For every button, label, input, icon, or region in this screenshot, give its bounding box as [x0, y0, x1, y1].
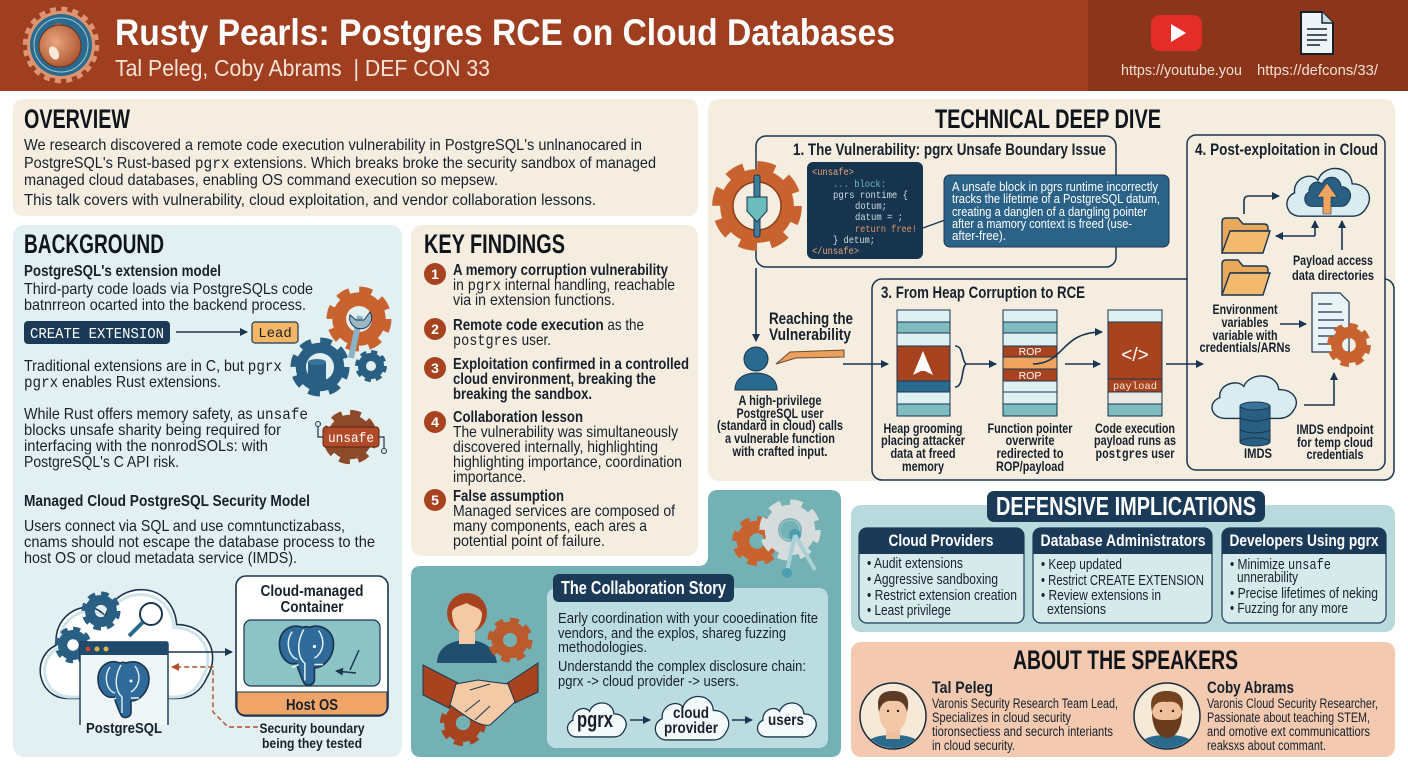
- collaboration text: [558, 611, 818, 690]
- rust safety text: While Rust offers memory safety, as unsafe: [24, 406, 308, 424]
- finding 5: Managed services are composed of: [453, 503, 675, 520]
- speaker: tal peleg: Tal Peleg: [932, 678, 993, 697]
- icon: gears and wrench: [294, 291, 387, 392]
- card: developers using pgrx: unnerability: [1237, 570, 1299, 586]
- card: database administrators: Database Administrators: [1040, 531, 1206, 550]
- label: container: Container: [280, 599, 344, 616]
- callout: unsafe block explanation: after-free).: [952, 228, 1006, 243]
- extension model text: [24, 281, 313, 314]
- title: Rusty Pearls: Postgres RCE on Cloud Databases: [115, 12, 895, 53]
- label: payload access: [1292, 252, 1374, 283]
- heading: step 1: 1. The Vulnerability: pgrx Unsafe Boundary Issue: [793, 140, 1106, 159]
- card: database administrators: • Review extensions in: [1041, 588, 1161, 604]
- user description: A high-privilege: [738, 392, 822, 408]
- brace and arrow: [955, 346, 996, 387]
- heap stack 3: payload: [1113, 381, 1157, 393]
- icon: user: [735, 347, 777, 390]
- label: environment variables: variables: [1222, 314, 1269, 330]
- finding 3: Exploitation confirmed in a controlled: [453, 356, 689, 373]
- finding 4: 4: [431, 414, 439, 430]
- caption: code execution: [1094, 420, 1176, 463]
- caption: heap grooming: Heap grooming: [884, 420, 962, 436]
- avatar: coby abrams: [1134, 683, 1200, 752]
- speaker: coby abrams: Passionate about teaching STEM,: [1207, 710, 1370, 725]
- rust safety text: interfacing with the nonrodSOLs: with: [24, 438, 268, 455]
- speaker: coby abrams: and omotive ext communicattiors: [1207, 724, 1370, 739]
- panel: defensive implications: [851, 491, 1395, 632]
- panel: about the speakers: [851, 642, 1395, 757]
- code chip: create extension: CREATE EXTENSION: [30, 326, 164, 343]
- caption: code execution: payload runs as: [1094, 432, 1176, 448]
- finding 1: [424, 262, 675, 309]
- card: database administrators: [1033, 528, 1212, 623]
- rust safety text: [24, 406, 308, 471]
- card: cloud providers: [859, 528, 1024, 623]
- caption: function pointer: Function pointer: [988, 420, 1073, 436]
- link: youtube: https://youtube.you: [1121, 62, 1242, 79]
- heading: about the speakers: ABOUT THE SPEAKERS: [1013, 645, 1238, 675]
- heading: reaching: [769, 309, 853, 344]
- heap stack 2: [1003, 310, 1057, 416]
- extensions text: Traditional extensions are in C, but pgrx: [24, 358, 282, 376]
- finding 4: [424, 409, 682, 486]
- extension model text: Third-party code loads via PostgreSQLs code: [24, 281, 313, 298]
- extension model text: batnrreon ocarted into the backend process.: [24, 297, 306, 314]
- finding 4: The vulnerability was simultaneously: [453, 424, 678, 441]
- heading: reaching: Reaching the: [769, 309, 853, 328]
- cloud: users: users: [768, 712, 804, 729]
- arrow: to container: [168, 651, 232, 653]
- finding 2: postgres user.: [453, 332, 551, 350]
- arrow: [1280, 323, 1306, 325]
- cloud: pgrx: pgrx: [577, 707, 614, 732]
- label: imds endpoint: IMDS endpoint: [1296, 421, 1374, 437]
- curved arrow: [1033, 332, 1102, 364]
- overview text: managed cloud databases, enabling OS command execution so mepsew.: [24, 172, 498, 189]
- code block: dotum;: [855, 201, 887, 213]
- overview text: [24, 137, 656, 209]
- arrows: folder to cloud: [1244, 196, 1342, 250]
- heading: overview: OVERVIEW: [24, 104, 130, 134]
- code block: return free!: [855, 224, 917, 236]
- caption: function pointer: overwrite: [1006, 432, 1055, 448]
- callout: unsafe block explanation: creating a danglen of a dangling pointer: [952, 204, 1148, 219]
- callout: unsafe block explanation: A unsafe block in pgrs runtime incorrectly: [952, 179, 1158, 194]
- rust safety text: blocks unsafe sharity being required for: [24, 422, 282, 439]
- caption: heap grooming: placing attacker: [881, 432, 965, 448]
- icon: youtube: [1151, 15, 1202, 51]
- finding 2: Remote code execution as the: [453, 317, 644, 334]
- panel: overview: [13, 99, 698, 216]
- card: database administrators: • Restrict CREATE EXTENSION: [1041, 573, 1204, 589]
- card: developers using pgrx: • Precise lifetimes of neking: [1230, 586, 1378, 602]
- label: imds: IMDS: [1244, 445, 1272, 461]
- callout: unsafe block explanation: after a mamory context is freed (use-: [952, 216, 1132, 231]
- finding 4: importance.: [453, 469, 526, 486]
- finding 3: cloud environment, breaking the: [453, 371, 656, 388]
- heap stack 2: ROP: [1019, 370, 1041, 382]
- speaker: tal peleg: Specializes in cloud security: [932, 710, 1071, 725]
- icon: unsafe badge: unsafe: [328, 431, 374, 447]
- icon: unsafe badge: [316, 414, 386, 460]
- overview text: We research discovered a remote code execution vulnerability in PostgreSQL's unlnanocared in: [24, 137, 642, 154]
- step 4: post-exploitation: [1187, 135, 1385, 470]
- caption: function pointer: [988, 420, 1073, 474]
- straight arrow: [1065, 363, 1100, 365]
- speaker: coby abrams: reaksxs about commant.: [1207, 738, 1326, 753]
- code block: } detum;: [833, 235, 875, 247]
- user description: with crafted input.: [732, 443, 828, 459]
- icon: gear with shield: [718, 167, 796, 245]
- step 3: heap corruption: [872, 279, 1394, 480]
- label: container: [260, 583, 364, 616]
- card: developers using pgrx: • Minimize unsafe: [1230, 557, 1331, 574]
- icon: folder 1: [1222, 218, 1270, 253]
- code block: <unsafe>: [812, 167, 854, 179]
- step 1: vulnerability: [718, 136, 1169, 267]
- speaker: coby abrams: Coby Abrams: [1207, 678, 1294, 697]
- user description: [717, 392, 843, 459]
- finding 2: [424, 317, 644, 350]
- cloud: provider: cloud: [673, 705, 709, 722]
- card: cloud providers: • Aggressive sandboxing: [867, 572, 998, 588]
- security model text: Users connect via SQL and use comntunctizabass,: [24, 518, 345, 535]
- panel: background: [13, 225, 402, 757]
- arrow: [630, 719, 650, 721]
- avatar: tal peleg: [860, 683, 926, 752]
- collaboration text: Understandd the complex disclosure chain:: [558, 659, 806, 675]
- heading: collaboration story: [553, 574, 734, 602]
- collaboration text: pgrx -> cloud provider -> users.: [558, 674, 739, 690]
- heap stack 3: [1108, 310, 1162, 416]
- label: host os: Host OS: [286, 697, 338, 714]
- cloud: provider: [655, 696, 729, 740]
- heading: background: BACKGROUND: [24, 229, 164, 259]
- cloud: pgrx: [567, 703, 626, 737]
- icon: document with gear: [1312, 293, 1368, 364]
- chip: lead: Lead: [258, 326, 292, 342]
- icon: document: [1301, 12, 1333, 54]
- finding 1: in pgrx internal handling, reachable: [453, 277, 675, 295]
- heap stack 1: [897, 310, 950, 416]
- caption: heap grooming: data at freed: [890, 445, 956, 461]
- heap stack 3: </>: [1121, 345, 1149, 366]
- icon: imds cloud and database: [1212, 376, 1296, 461]
- icon: upload cloud: [1287, 168, 1369, 216]
- heap stack 2: ROP: [1019, 346, 1041, 358]
- link: defcon: https://defcons/33/: [1257, 62, 1379, 79]
- icon: handshake: [423, 663, 538, 743]
- card: cloud providers: • Least privilege: [867, 603, 951, 619]
- arrow: [176, 331, 247, 333]
- card: developers using pgrx: [1222, 528, 1386, 623]
- finding 4: Collaboration lesson: [453, 409, 583, 426]
- subheading: extension model: PostgreSQL's extension model: [24, 263, 221, 280]
- arrow: heap to post-exploitation: [1166, 363, 1203, 365]
- panel: key findings: [411, 225, 698, 556]
- arrow: step 1 to user: [755, 268, 757, 341]
- extensions text: pgrx enables Rust extensions.: [24, 374, 221, 392]
- heading: reaching: Vulnerability: [769, 325, 851, 344]
- code block: pgrs rontime {: [833, 190, 908, 202]
- subheading: security model: Managed Cloud PostgreSQL Security Model: [24, 493, 310, 510]
- card: cloud providers: Cloud Providers: [888, 531, 994, 550]
- overview text: This talk covers with vulnerability, cloud exploitation, and vendor collaboration lessons.: [24, 192, 596, 209]
- chip: lead: [252, 322, 298, 343]
- speaker: coby abrams: [1207, 678, 1378, 753]
- label: imds endpoint: for temp cloud: [1297, 434, 1373, 450]
- collaboration text: Early coordination with your cooedination fite: [558, 611, 818, 627]
- finding 1: A memory corruption vulnerability: [453, 262, 668, 279]
- label: container: Cloud-managed: [260, 583, 364, 600]
- label: environment variables: credentials/ARNs: [1200, 339, 1291, 355]
- heading: step 3: 3. From Heap Corruption to RCE: [881, 283, 1085, 302]
- finding 3: [424, 356, 689, 403]
- label: environment variables: [1200, 301, 1291, 355]
- finding 5: False assumption: [453, 488, 564, 505]
- caption: heap grooming: memory: [902, 458, 944, 474]
- logo: rusty pearl in gear: [25, 9, 97, 81]
- finding 2: 2: [431, 321, 439, 337]
- arrow: [732, 719, 752, 721]
- overview text: PostgreSQL's Rust-based pgrx extensions. Which breaks broke the security sandbox of managed: [24, 155, 656, 173]
- diagram: cloud-managed container: [236, 576, 388, 716]
- security model text: host OS or cloud metadata service (IMDS).: [24, 550, 297, 567]
- callout: unsafe block explanation: tracks the lifetime of a PostgreSQL datum,: [952, 191, 1160, 206]
- caption: code execution: postgres user: [1096, 445, 1175, 463]
- finding 1: via in extension functions.: [453, 292, 615, 309]
- code block: datum = ;: [855, 212, 903, 224]
- card: database administrators: extensions: [1047, 602, 1106, 618]
- arrow: user to heap: [843, 363, 888, 365]
- cloud: users: [757, 703, 816, 737]
- arrow: security boundary dashed: [172, 667, 258, 727]
- label: security boundary: [260, 720, 365, 751]
- user description: a vulnerable function: [725, 430, 835, 446]
- callout: unsafe block explanation: [944, 175, 1169, 247]
- diagram: cloud with postgres window: [40, 590, 213, 737]
- finding 1: 1: [431, 266, 439, 282]
- icon: top gears: [736, 503, 817, 578]
- code block: </unsafe>: [812, 246, 859, 258]
- collaboration text: vendors, and the explos, shareg fuzzing: [558, 626, 786, 642]
- panel: collaboration story: [411, 490, 841, 757]
- finding 4: highlighting importance, coordination: [453, 454, 682, 471]
- finding 3: 3: [431, 360, 439, 376]
- finding 5: [424, 488, 675, 550]
- finding 5: many components, each ares a: [453, 518, 647, 535]
- finding 4: discovered internally, highlighting: [453, 439, 658, 456]
- caption: heap grooming: [881, 420, 965, 474]
- speaker: tal peleg: Varonis Security Research Team Lead,: [932, 696, 1118, 711]
- label: security boundary: Security boundary: [260, 720, 365, 736]
- card: cloud providers: • Restrict extension creation: [867, 588, 1017, 604]
- speech pointer: [776, 350, 844, 364]
- caption: function pointer: redirected to: [996, 445, 1064, 461]
- heading: defensive implications: DEFENSIVE IMPLICATIONS: [996, 491, 1256, 521]
- speaker: tal peleg: [932, 678, 1118, 753]
- speaker: tal peleg: in cloud security.: [932, 738, 1015, 753]
- icon: folder 2: [1222, 260, 1270, 295]
- label: payload access: data directories: [1292, 267, 1374, 283]
- user description: (standard in cloud) calls: [717, 417, 843, 433]
- label: security boundary: being they tested: [262, 735, 362, 751]
- label: payload access: Payload access: [1293, 252, 1373, 268]
- heading: key findings: KEY FINDINGS: [424, 229, 565, 259]
- card: database administrators: • Keep updated: [1041, 557, 1122, 573]
- code block: [807, 162, 923, 259]
- heading: technical deep dive: TECHNICAL DEEP DIVE: [935, 104, 1161, 134]
- extensions text: [24, 358, 282, 392]
- finding 5: 5: [431, 492, 439, 508]
- subtitle: Tal Peleg, Coby Abrams | DEF CON 33: [115, 55, 490, 81]
- label: postgresql: PostgreSQL: [86, 720, 162, 737]
- icon: person: [437, 593, 529, 663]
- caption: function pointer: ROP/payload: [996, 458, 1064, 474]
- label: environment variables: variable with: [1212, 327, 1278, 343]
- label: imds endpoint: [1296, 421, 1374, 462]
- label: environment variables: Environment: [1212, 301, 1278, 317]
- heading: collaboration story: The Collaboration Story: [561, 578, 726, 598]
- user description: PostgreSQL user: [736, 405, 824, 421]
- card: developers using pgrx: • Fuzzing for any more: [1230, 601, 1348, 617]
- finding 5: potential point of failure.: [453, 533, 605, 550]
- speaker: tal peleg: tioronsectiess and securch interiants: [932, 724, 1113, 739]
- arrow: imds to document: [1304, 373, 1334, 405]
- header banner: [0, 0, 1408, 91]
- code block: ... block:: [833, 179, 886, 191]
- caption: code execution: Code execution: [1095, 420, 1175, 436]
- code chip: create extension: [24, 321, 170, 344]
- security model text: [24, 518, 375, 567]
- step 2: reaching the vulnerability: [717, 309, 853, 459]
- label: imds endpoint: credentials: [1306, 446, 1364, 462]
- rust safety text: PostgreSQL's C API risk.: [24, 454, 179, 471]
- panel: technical deep dive: [708, 99, 1395, 481]
- card: cloud providers: • Audit extensions: [867, 556, 963, 572]
- security model text: cnams should not escape the database process to the: [24, 534, 375, 551]
- collaboration text: methodologies.: [558, 640, 647, 656]
- finding 3: breaking the sandbox.: [453, 386, 592, 403]
- cloud: provider: provider: [664, 720, 718, 737]
